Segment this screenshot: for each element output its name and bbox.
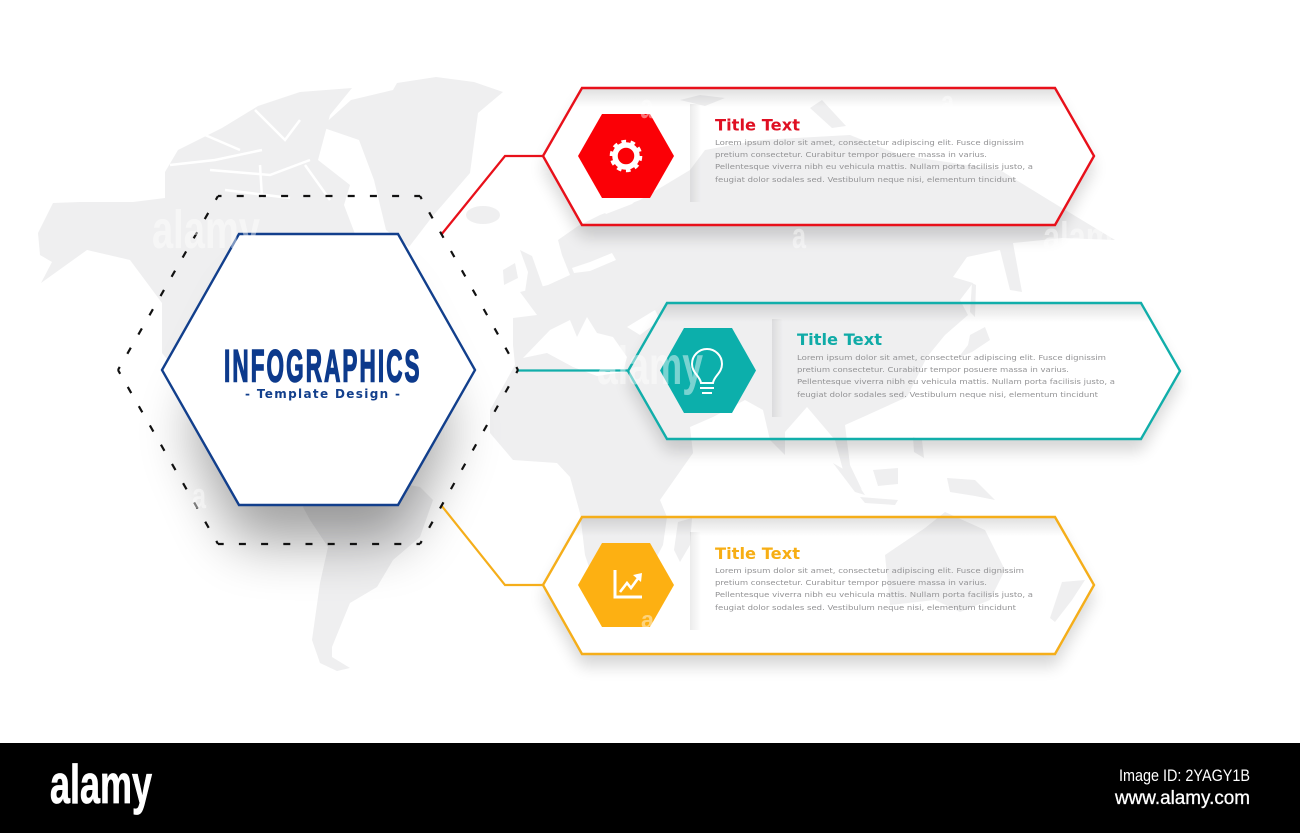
footer website: www.alamy.com	[1114, 788, 1250, 809]
soft shadows under the shapes	[190, 100, 1180, 666]
panel: teal	[627, 302, 1182, 440]
footer logo: alamy	[50, 753, 152, 815]
title: yellow panel: Title Text	[715, 544, 800, 563]
body text: teal panel: Pellentesque viverra nibh eu vehicula mattis. Nullam porta facilisis justo, a	[797, 377, 1115, 386]
watermarks: a	[792, 215, 807, 256]
body text: teal panel: feugiat dolor sodales sed. Vestibulum neque nisi, elementum tincidunt	[797, 390, 1098, 399]
title: teal panel: Title Text	[797, 330, 882, 349]
body text: yellow panel: Lorem ipsum dolor sit amet, consectetur adipiscing elit. Fusce dignissim	[715, 566, 1024, 575]
icon: gear on red hexagon	[578, 114, 674, 198]
subheading: - Template Design -	[245, 387, 400, 401]
world map background	[38, 77, 1115, 671]
body text: red panel: Pellentesque viverra nibh eu vehicula mattis. Nullam porta facilisis justo, a	[715, 162, 1033, 171]
title: red panel: Title Text	[715, 116, 800, 134]
panel: yellow	[542, 516, 1096, 656]
body text: red panel: pretium consectetur. Curabitur tempor posuere massa in varius.	[715, 150, 987, 159]
icon: growth chart on yellow hexagon	[578, 543, 674, 627]
icon: light bulb on teal hexagon	[660, 328, 756, 413]
heading: infographics: INFOGRAPHICS	[224, 341, 422, 392]
body text: red panel: Lorem ipsum dolor sit amet, consectetur adipiscing elit. Fusce dignissim	[715, 138, 1024, 147]
watermarks: alamy	[152, 200, 260, 260]
body text: yellow panel	[715, 566, 1033, 612]
watermarks: a	[941, 84, 955, 122]
connector lines	[441, 156, 628, 585]
body text: red panel: feugiat dolor sodales sed. Vestibulum neque nisi, elementum tincidunt	[715, 175, 1016, 184]
watermarks: alam	[1043, 215, 1113, 259]
watermarks: a	[640, 88, 654, 126]
body text: teal panel: pretium consectetur. Curabitur tempor posuere massa in varius.	[797, 365, 1069, 374]
dashed outer hexagon	[118, 196, 518, 544]
watermarks	[152, 84, 1113, 634]
body text: teal panel	[797, 353, 1115, 399]
watermarks: alamy	[597, 336, 703, 396]
footer bar	[0, 743, 1300, 833]
watermarks: a	[641, 607, 655, 634]
watermarks: a	[192, 475, 207, 516]
footer image id: Image ID: 2YAGY1B	[1119, 766, 1250, 785]
panel: red	[542, 86, 1096, 226]
body text: teal panel: Lorem ipsum dolor sit amet, consectetur adipiscing elit. Fusce dignissim	[797, 353, 1106, 362]
body text: yellow panel: feugiat dolor sodales sed. Vestibulum neque nisi, elementum tincidunt	[715, 603, 1016, 612]
body text: red panel	[715, 138, 1033, 184]
body text: yellow panel: Pellentesque viverra nibh eu vehicula mattis. Nullam porta facilisis justo, a	[715, 590, 1033, 599]
centre hexagon with heading	[162, 234, 475, 505]
body text: yellow panel: pretium consectetur. Curabitur tempor posuere massa in varius.	[715, 578, 987, 587]
